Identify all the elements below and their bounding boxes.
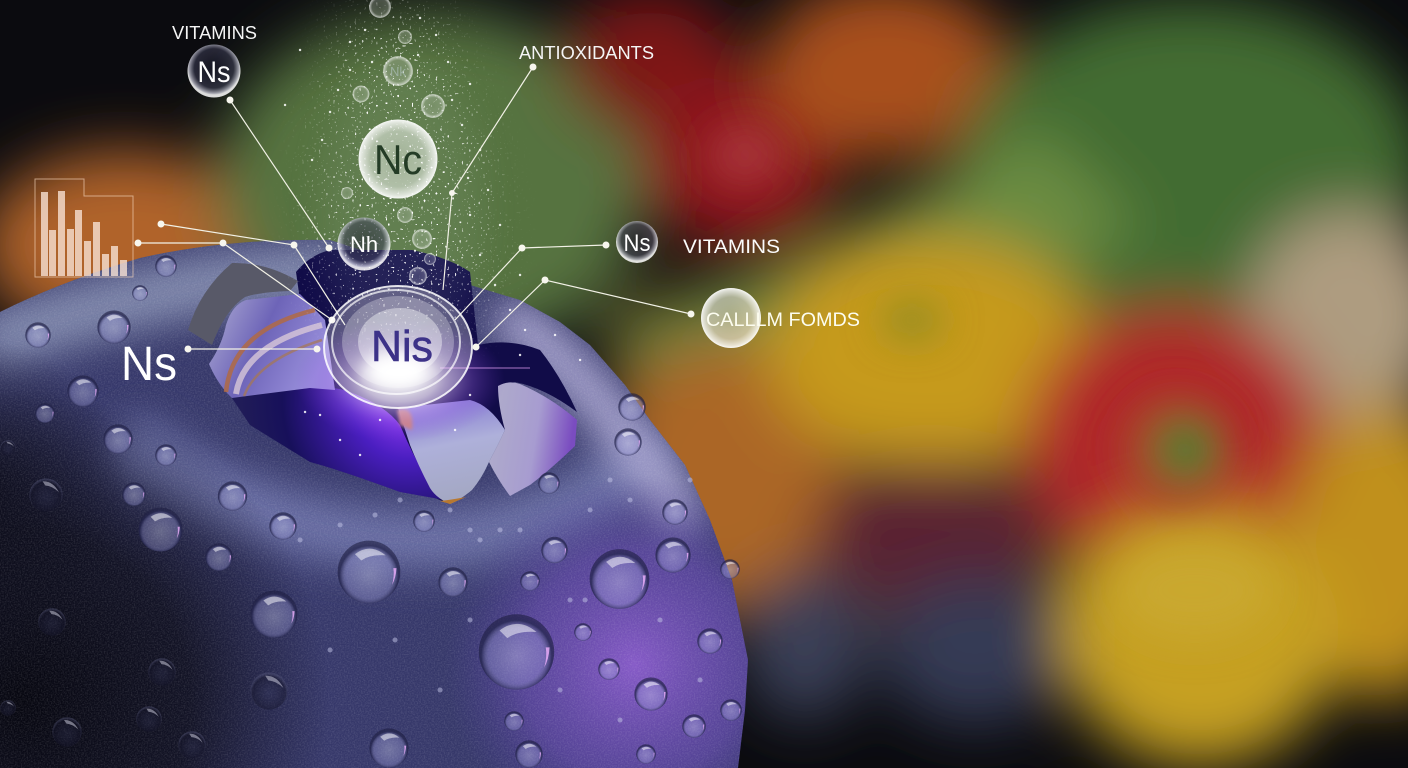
- small floating bubbles: [341, 0, 445, 285]
- crater with exposed flesh: [188, 250, 577, 504]
- bubble: Ns top: [188, 44, 240, 98]
- bubble: calcium foods: [701, 288, 860, 348]
- bubble: Ns right: [616, 221, 658, 263]
- blueberry skin: [0, 230, 760, 768]
- bubble: Nc: Nc: [374, 136, 422, 183]
- bar chart: [35, 179, 133, 277]
- label: vitamins right: VITAMINS: [683, 237, 780, 258]
- label: vitamins top: VITAMINS: [172, 23, 257, 43]
- central bubble: Nis: [324, 286, 472, 408]
- bubble: Nk small: [383, 56, 413, 86]
- label: antioxidants: ANTIOXIDANTS: [519, 43, 654, 63]
- connector lines: [134, 64, 694, 352]
- central bubble: Nis: Nis: [371, 322, 433, 371]
- label: Ns left: Ns: [121, 338, 177, 391]
- bubble: calcium foods: CALLLM FOMDS: [706, 310, 860, 331]
- bubble: Ns right: Ns: [624, 230, 650, 257]
- rising particle cloud: [285, 10, 580, 455]
- bubble: Nh: [338, 218, 390, 270]
- bubble: Nc: [358, 120, 438, 198]
- bubble: Nk small: Nk: [390, 64, 406, 79]
- bubble: Ns top: Ns: [198, 56, 230, 89]
- bubble: Nh: Nh: [350, 232, 378, 257]
- water droplets: [0, 255, 742, 768]
- central glow: [295, 318, 530, 442]
